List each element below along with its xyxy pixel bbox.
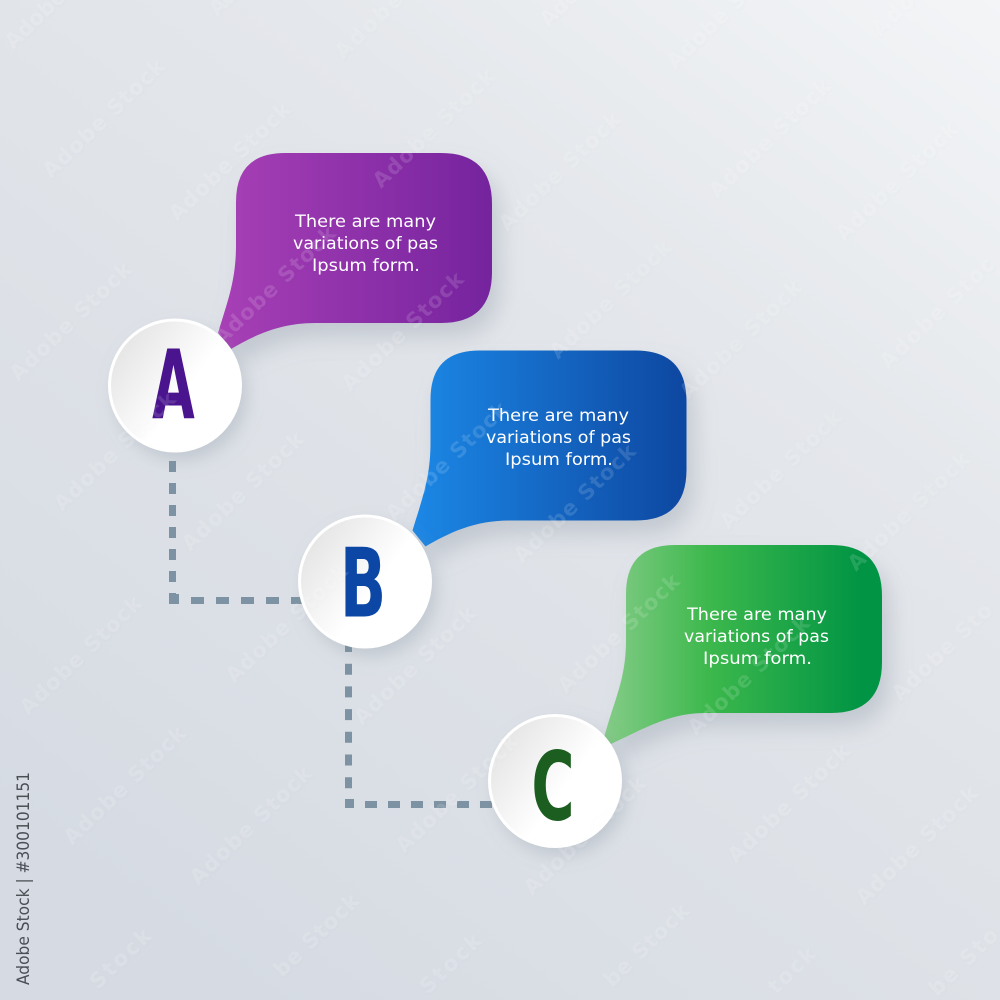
panel: bubble C [604,545,890,758]
watermark pattern: Adobe Stock [49,386,181,516]
watermark pattern: Adobe Stock [209,220,341,350]
watermark pattern: Adobe Stock [368,63,500,193]
panel: bubble A [218,153,500,363]
watermark pattern: Adobe Stock [381,396,513,526]
watermark pattern: be Stock [599,898,695,992]
text: bubble C: variations of pas [684,627,829,646]
watermark pattern: Adobe Stock [519,770,651,900]
watermark pattern: Adobe Stock [38,53,170,183]
text: bubble B: There are many [487,406,629,425]
watermark pattern: Adobe Stock [221,558,353,688]
watermark pattern: Adobe Sto [887,598,997,706]
panel: bubble B [412,350,694,560]
watermark pattern: Adobe Stock [723,738,855,868]
circle badge B: B [340,528,386,639]
text: bubble A: variations of pas [293,234,438,253]
text: bubble C: Ipsum form. [703,649,812,668]
watermark pattern: Adobe Stock [494,106,626,236]
text: bubble B: variations of pas [486,428,631,447]
watermark pattern: Adobe Stock [545,234,677,364]
watermark pattern: Adobe Stock [15,590,147,720]
watermark pattern: Adobe Stock [337,266,469,396]
watermark pattern: Adobe Stock [177,426,309,556]
text: bubble C: There are many [686,605,827,624]
circle badge B [298,514,437,656]
watermark pattern: Adobe Stock [831,116,963,246]
text: bubble A: Ipsum form. [312,256,420,275]
dashed connector A to B [169,461,304,604]
watermark pattern: Adobe Stock [509,438,641,568]
circle badge C [488,714,627,855]
watermark pattern: Adobe Stoc [875,252,999,374]
circle badge C: C [531,732,575,842]
circle badge A [108,318,247,460]
watermark pattern: tock [763,941,821,999]
watermark pattern: Stock [85,923,157,994]
watermark pattern: Adobe Stock [391,728,523,858]
watermark pattern: Adobe Stock [715,404,847,534]
watermark pattern: Adobe Stock [704,73,836,203]
stock id label: Adobe Stock | #300101151 [14,772,34,985]
text: bubble B: Ipsum form. [505,450,613,469]
watermark pattern: Adobe Stock [851,780,983,910]
text: bubble A: There are many [294,212,436,231]
text: bubble A [293,212,438,275]
watermark pattern: Adobe Stock [185,760,317,890]
watermark pattern: Adobe Stock [349,600,481,730]
watermark pattern: Adobe Stock [553,568,685,698]
circle badge A: A [152,331,195,441]
text: bubble B [486,406,631,469]
watermark pattern: Adobe Stock [675,274,807,404]
watermark pattern: Adobe Stock [683,610,815,740]
watermark pattern: Adobe Stock [59,720,191,850]
watermark pattern: Adobe Stock [843,446,975,576]
watermark pattern: be Stock [269,888,365,982]
watermark pattern: Adobe Stock [164,96,296,226]
dashed connector B to C [345,641,494,808]
text: bubble C [684,605,829,668]
watermark pattern: Adobe Stock [5,256,137,386]
watermark pattern: Stock [415,928,487,999]
